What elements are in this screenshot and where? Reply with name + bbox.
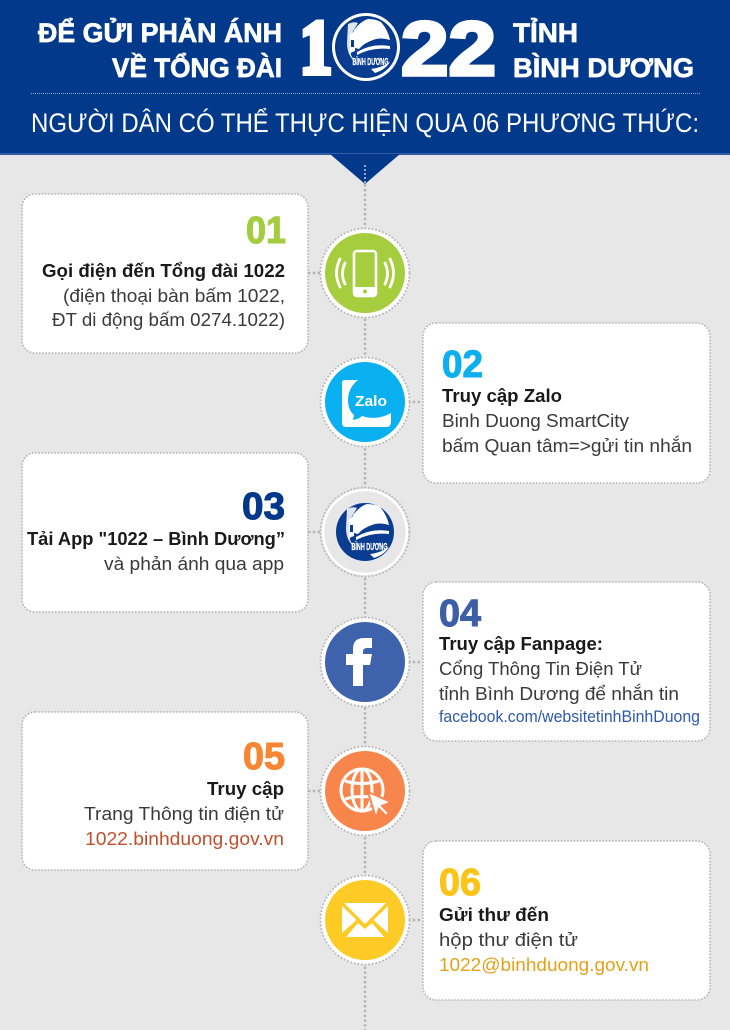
header banner xyxy=(0,0,730,184)
panel: step 01 xyxy=(22,194,308,353)
panel: step 05: 05 xyxy=(243,736,285,778)
icon: phone xyxy=(320,228,410,318)
heading left: ĐỂ GỬI PHẢN ÁNH xyxy=(38,16,282,48)
panel: step 03: Tải App "1022 – Bình Dương” xyxy=(27,529,285,549)
panel: step 03: 03 xyxy=(242,486,285,528)
panel: step 04: Cổng Thông Tin Điện Tử xyxy=(439,659,642,679)
panel: step 04 xyxy=(423,582,710,741)
panel: step 06: Gửi thư đến xyxy=(439,905,549,925)
heading number 1022: 22 xyxy=(401,7,496,92)
heading left xyxy=(38,16,282,83)
panel: step 03 xyxy=(22,453,308,612)
icon: app logo xyxy=(320,488,410,576)
panel: step 04: facebook.com/websitetinhBinhDuong xyxy=(439,707,700,726)
header pointer xyxy=(330,154,400,184)
panel: step 06 xyxy=(423,841,710,1000)
heading number 1022 xyxy=(300,6,496,92)
panel: step 02: Truy cập Zalo xyxy=(442,386,562,406)
logo in number xyxy=(332,13,400,81)
panel: step 01: ĐT di động bấm 0274.1022) xyxy=(52,310,285,330)
timeline line xyxy=(364,165,366,1030)
panel: step 04: tỉnh Bình Dương để nhắn tin xyxy=(439,683,679,704)
panel: step 05: 1022.binhduong.gov.vn xyxy=(85,829,284,849)
panel: step 06: 1022@binhduong.gov.vn xyxy=(439,955,649,975)
heading right: BÌNH DƯƠNG xyxy=(513,52,694,83)
panel: step 01: (điện thoại bàn bấm 1022, xyxy=(63,286,285,306)
panel: step 04: 04 xyxy=(439,593,481,635)
icon: mail xyxy=(320,876,410,964)
heading right: TỈNH xyxy=(513,16,578,48)
panel: step 01: Gọi điện đến Tổng đài 1022 xyxy=(42,261,285,281)
connectors xyxy=(308,273,422,920)
icon: facebook xyxy=(320,618,410,706)
heading number 1022: 1 xyxy=(300,6,332,90)
panel: step 01: 01 xyxy=(246,210,286,252)
panel: step 05: Truy cập xyxy=(207,779,284,799)
panel: step 02: bấm Quan tâm=>gửi tin nhắn xyxy=(442,435,692,456)
icon: zalo xyxy=(320,358,410,446)
icon: web globe xyxy=(320,746,410,836)
heading right xyxy=(513,16,694,83)
heading left: VỀ TỔNG ĐÀI xyxy=(112,52,282,83)
panel: step 05 xyxy=(22,712,308,870)
panel: step 06: 06 xyxy=(439,862,481,904)
panel: step 05: Trang Thông tin điện tử xyxy=(84,804,284,824)
panel: step 06: hộp thư điện tử xyxy=(439,930,578,950)
panel: step 02 xyxy=(423,323,710,483)
panel: step 02: 02 xyxy=(442,344,483,386)
icon: zalo: Zalo xyxy=(355,393,387,410)
panel: step 03: và phản ánh qua app xyxy=(104,554,284,574)
panel: step 02: Binh Duong SmartCity xyxy=(442,411,629,431)
panel: step 04: Truy cập Fanpage: xyxy=(439,634,603,654)
